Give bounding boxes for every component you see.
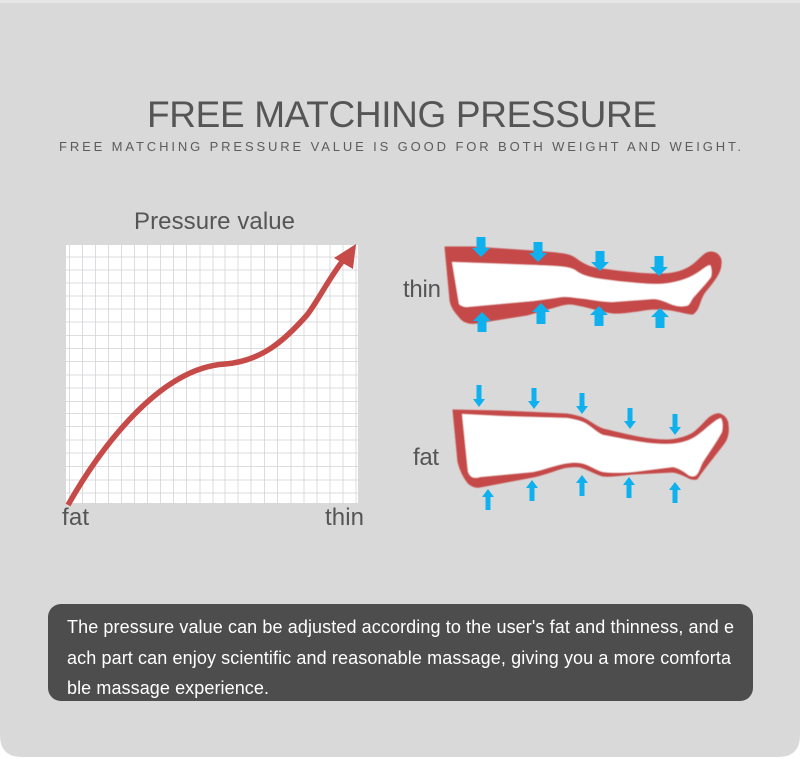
callout: description — [48, 604, 753, 701]
pressure arrows, thin leg — [472, 237, 669, 332]
curve arrowhead — [334, 244, 356, 269]
panel: pressure chart — [62, 208, 364, 531]
panel: thin leg — [403, 237, 721, 332]
x label: fat: fat — [62, 504, 89, 531]
subtitle: FREE MATCHING PRESSURE VALUE IS GOOD FOR BOTH WEIGHT AND WEIGHT. — [59, 139, 741, 154]
fat label: fat — [413, 444, 439, 471]
callout text: ble massage experience. — [67, 678, 269, 698]
callout text: The pressure value can be adjusted according to the user's fat and thinness, and e — [67, 617, 734, 637]
callout text: ach part can enjoy scientific and reasonable massage, giving you a more comforta — [67, 648, 732, 668]
pressure arrows, fat leg — [473, 385, 681, 510]
panel: fat leg — [413, 385, 728, 510]
leg silhouette with thick air bag — [445, 247, 721, 323]
pressure curve — [68, 258, 345, 505]
leg silhouette with thin air bag — [453, 410, 728, 487]
title: FREE MATCHING PRESSURE — [147, 94, 657, 135]
thin label: thin — [403, 276, 441, 303]
callout text — [67, 617, 734, 698]
x label: thin: thin — [325, 504, 364, 531]
chart heading: Pressure value — [134, 208, 295, 235]
chart plot area — [66, 245, 358, 503]
